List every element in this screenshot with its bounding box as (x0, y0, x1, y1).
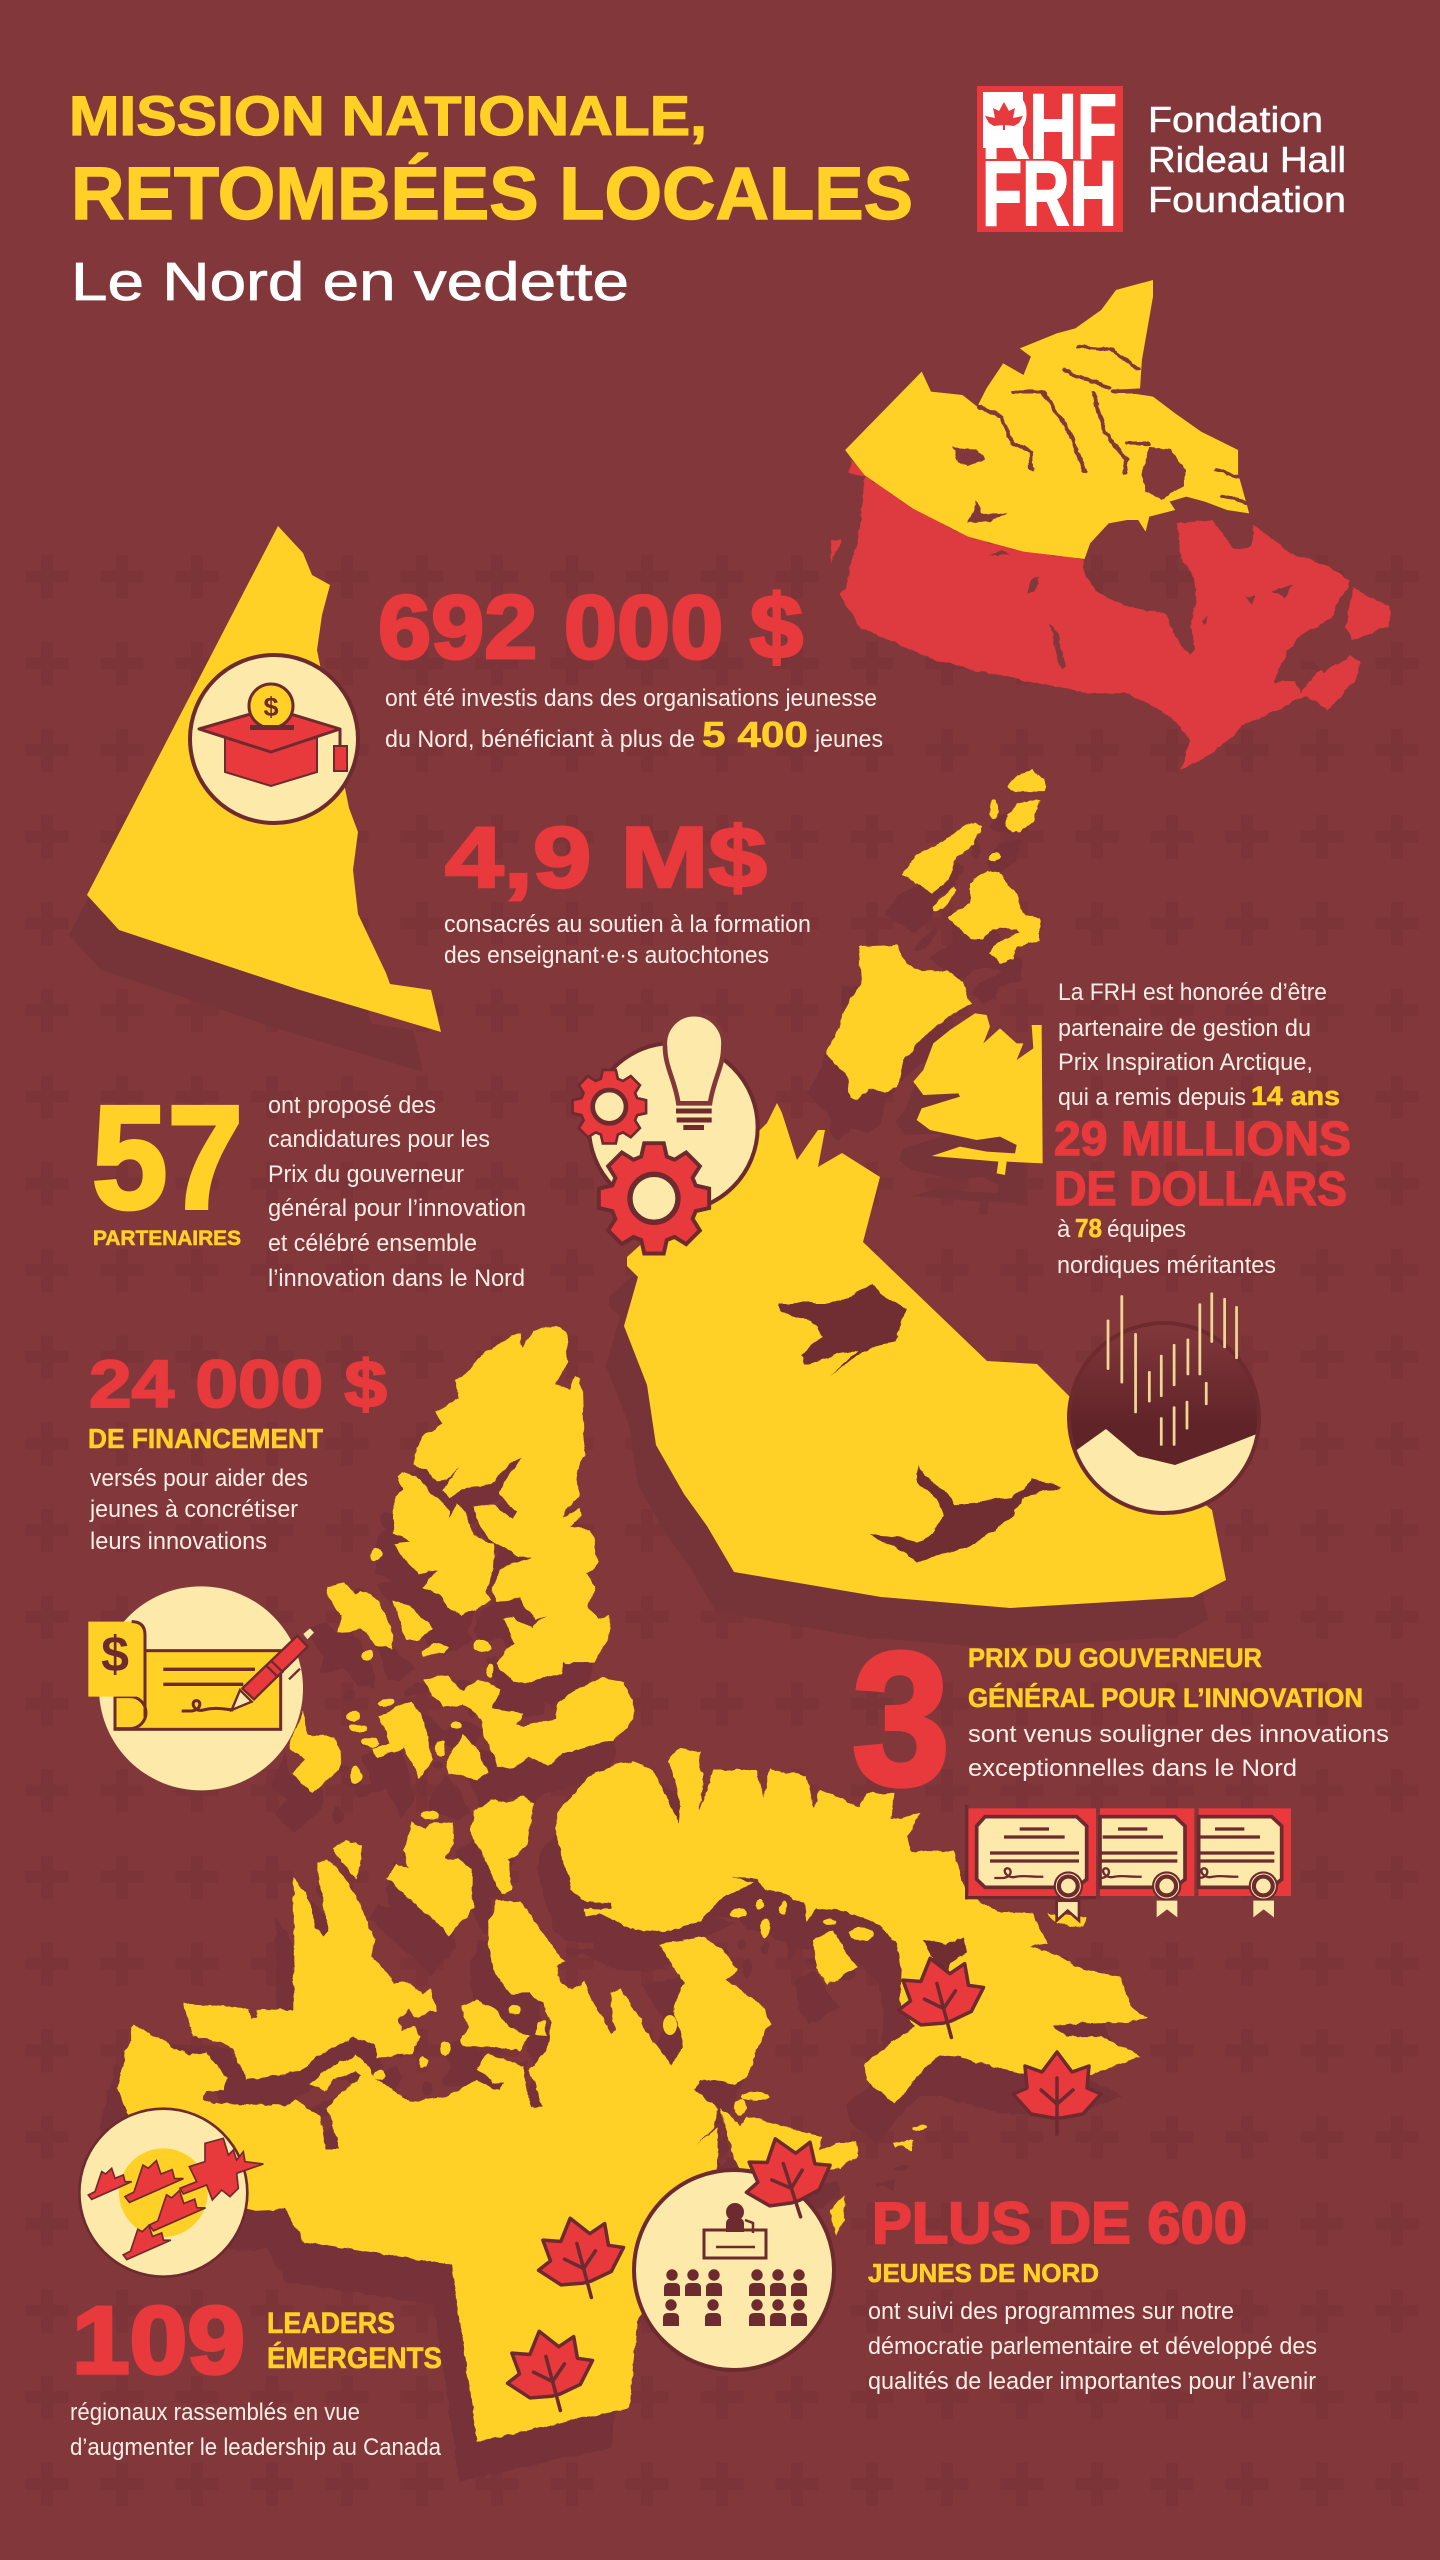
map: northern territories (87, 526, 1226, 2442)
background plus pattern (0, 534, 1440, 2528)
stat: 24 000 $: versés pour aider des (90, 1465, 308, 1492)
stat: 24 000 $: DE FINANCEMENT (88, 1423, 323, 1454)
certificate 1 (977, 1817, 1087, 1921)
icon: lightbulb and gears (573, 1014, 758, 1253)
stat: 3 prix: exceptionnelles dans le Nord (968, 1755, 1297, 1782)
stat: 109 leaders: régionaux rassemblés en vue (70, 2399, 360, 2426)
icon: maple leaf south of Baffin (1013, 2052, 1101, 2134)
stat: Prix Inspiration Arctique: 78 (1075, 1213, 1102, 1243)
stat: 109 leaders: LEADERS (267, 2307, 395, 2340)
Canada: inlets and lakes (953, 347, 1353, 673)
stat: plus de 600: qualités de leader importantes pour l’avenir (868, 2368, 1316, 2395)
stat: 57 partenaires: candidatures pour les (268, 1126, 490, 1153)
Canada south (red) (831, 458, 1390, 770)
stat: Prix Inspiration Arctique: 29 MILLIONS (1054, 1113, 1351, 1166)
title: RETOMBÉES LOCALES (71, 152, 913, 235)
lake: Great Bear (774, 1285, 904, 1377)
stat: 692 000 $: ont été investis dans des organisations jeunesse (385, 685, 877, 712)
stat: Prix Inspiration Arctique: à (1057, 1216, 1071, 1243)
logo: Rideau Hall Foundation: Rideau Hall (1148, 139, 1346, 180)
map: Nunavut high arctic islands (288, 1325, 633, 1793)
stat: Prix Inspiration Arctique (1054, 979, 1351, 1279)
stat: plus de 600: JEUNES DE NORD (868, 2258, 1099, 2288)
title: MISSION NATIONALE, (69, 84, 707, 147)
certificate frames (968, 1808, 1291, 1896)
stat: 3 prix: PRIX DU GOUVERNEUR (968, 1643, 1262, 1673)
stat: Prix Inspiration Arctique: DE DOLLARS (1054, 1163, 1347, 1216)
logo: Rideau Hall Foundation: Foundation (1148, 179, 1346, 220)
icon: maple leaf above podium circle (733, 2125, 842, 2230)
stat: Prix Inspiration Arctique: qui a remis depuis (1058, 1084, 1246, 1111)
icon: emerging leaders circle (79, 2109, 263, 2277)
stat: 24 000 $: 24 000 $ (89, 1347, 387, 1422)
map: Nunavut mainland and western islands (117, 1795, 772, 2442)
stat: 4,9 M$: consacrés au soutien à la formation (444, 911, 811, 938)
map: Yukon (87, 526, 441, 1032)
stat: 57 partenaires: général pour l’innovation (268, 1195, 526, 1222)
stat: 692 000 $: jeunes (814, 726, 883, 753)
stat: Prix Inspiration Arctique: 14 ans (1251, 1081, 1340, 1111)
stat: Prix Inspiration Arctique: La FRH est honorée d’être (1058, 979, 1327, 1006)
icon: maple leaf on mainland (528, 2207, 634, 2309)
Canada north (yellow) (845, 280, 1249, 559)
map: Baffin Island (557, 1748, 1147, 2235)
icon: graduation cap in circle: $ (263, 692, 279, 722)
stat: 3 prix: GÉNÉRAL POUR L’INNOVATION (968, 1682, 1363, 1713)
stat: 109 leaders (70, 2287, 442, 2461)
audience (663, 2269, 807, 2326)
logo: Rideau Hall Foundation: Fondation (1148, 99, 1323, 140)
stat: 57 partenaires (92, 1076, 526, 1292)
map: Canada overview (831, 280, 1390, 770)
icon: podium and audience circle (634, 2170, 834, 2370)
stat: 692 000 $ (378, 578, 883, 755)
stat: plus de 600 (868, 2191, 1317, 2395)
stat: Prix Inspiration Arctique: équipes (1107, 1216, 1186, 1243)
inlet: Baffin bay (923, 1937, 967, 1975)
certificate 2 (1100, 1817, 1185, 1917)
icon: cheque and pen (88, 1586, 314, 1790)
certificate 3 (1199, 1817, 1282, 1917)
icon: cheque and pen: $ (101, 1627, 129, 1683)
title: Le Nord en vedette (71, 252, 629, 312)
stat: 692 000 $: 5 400 (702, 714, 808, 755)
map: arctic islands of the Northwest Territories (827, 770, 1045, 1175)
stat: 3 prix (852, 1614, 1389, 1825)
stat: plus de 600: PLUS DE 600 (872, 2191, 1247, 2256)
stat: 57 partenaires: et célébré ensemble (268, 1230, 477, 1257)
stat: 4,9 M$: des enseignant·e·s autochtones (444, 942, 769, 969)
lake: Great Slave (872, 1467, 1060, 1564)
stat: 3 prix: sont venus souligner des innovations (968, 1721, 1389, 1748)
icon: maple leaf on Baffin (888, 1947, 994, 2049)
map: lakes and inlets (663, 1285, 1060, 2035)
logo: Rideau Hall Foundation (977, 76, 1346, 245)
stat: 24 000 $ (88, 1347, 387, 1555)
lake: Baffin west (663, 2015, 677, 2035)
stat: 57 partenaires: 57 (92, 1076, 243, 1240)
icon: maple leaf lower mainland (497, 2320, 603, 2422)
stat: plus de 600: ont suivi des programmes sur notre (868, 2298, 1234, 2325)
stat: 109 leaders: ÉMERGENTS (267, 2341, 442, 2375)
map: Northwest Territories (624, 1103, 1226, 1608)
stat: 57 partenaires: ont proposé des (268, 1092, 436, 1119)
stat: Prix Inspiration Arctique: nordiques méritantes (1057, 1252, 1276, 1279)
stat: 24 000 $: leurs innovations (90, 1528, 267, 1555)
logo: Rideau Hall Foundation: RHF (982, 76, 1117, 178)
stat: 692 000 $: du Nord, bénéficiant à plus de (385, 726, 695, 753)
map shadow (69, 566, 1208, 2482)
icon: aurora in circle (1060, 1293, 1262, 1520)
stat: 57 partenaires: Prix du gouverneur (268, 1161, 464, 1188)
stat: 57 partenaires: l’innovation dans le Nord (268, 1265, 525, 1292)
stat: 57 partenaires: PARTENAIRES (93, 1227, 241, 1250)
stat: plus de 600: démocratie parlementaire et développé des (868, 2333, 1317, 2360)
title (69, 84, 913, 312)
stat: Prix Inspiration Arctique: partenaire de gestion du (1058, 1015, 1311, 1042)
stat: 24 000 $: jeunes à concrétiser (89, 1496, 298, 1523)
stat: 109 leaders: 109 (72, 2287, 245, 2394)
icon: three certificates (965, 1805, 1291, 1921)
flat leaves (88, 2138, 263, 2260)
stat: 4,9 M$: 4,9 M$ (445, 810, 767, 906)
logo: Rideau Hall Foundation: FRH (982, 143, 1117, 245)
stat: Prix Inspiration Arctique: Prix Inspiration Arctique, (1058, 1049, 1313, 1076)
stat: 3 prix: 3 (852, 1614, 950, 1825)
icon: graduation cap in circle (190, 655, 358, 823)
stat: 4,9 M$ (444, 810, 811, 969)
stat: 692 000 $: 692 000 $ (378, 578, 803, 678)
stat: 109 leaders: d’augmenter le leadership au Canada (70, 2434, 442, 2461)
